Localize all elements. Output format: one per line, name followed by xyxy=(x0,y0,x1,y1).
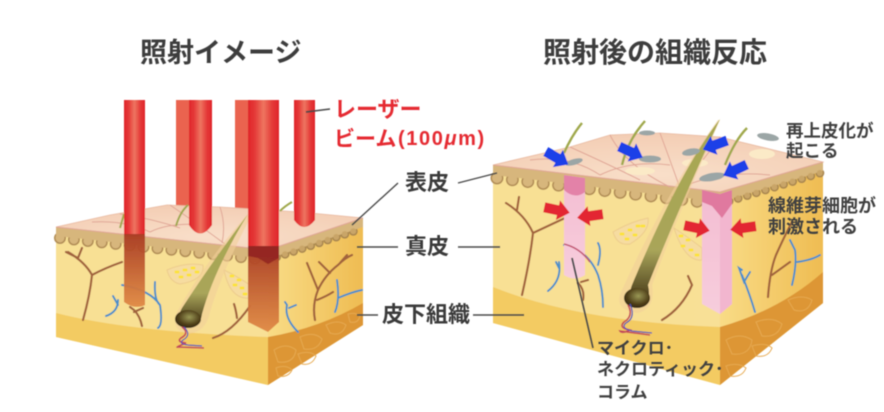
fat clusters xyxy=(167,264,250,298)
dermis front xyxy=(493,165,720,385)
label: laser beam: ビーム xyxy=(334,128,396,151)
blue vessels xyxy=(106,280,362,332)
label: micro necrotic column: マイクロ･ xyxy=(597,339,673,358)
micro necrotic column left xyxy=(564,175,585,278)
hair root vessels xyxy=(620,305,650,335)
micro necrotic column right xyxy=(702,190,732,314)
red arrows xyxy=(542,198,757,240)
label: fibroblast stimulation: 線維芽細胞が xyxy=(768,195,876,216)
subcutis side xyxy=(268,303,363,385)
label: micro necrotic column: コラム xyxy=(597,383,648,402)
hair follicle xyxy=(175,215,250,334)
panel: left skin block xyxy=(56,100,363,385)
fat clusters xyxy=(613,218,702,260)
label: epidermis: 表皮 xyxy=(405,170,449,195)
pale highlights xyxy=(625,167,655,175)
epidermis band xyxy=(493,162,823,204)
hair root vessels xyxy=(177,327,204,348)
small hairs xyxy=(120,202,292,228)
label: subcutaneous tissue: 皮下組織 xyxy=(382,302,470,327)
label: dermis: 真皮 xyxy=(405,234,449,259)
label: micro necrotic column: ネクロティック･ xyxy=(597,360,723,379)
brown vessels xyxy=(506,197,792,320)
back laser beams xyxy=(176,100,250,233)
label: fibroblast stimulation: 刺激される xyxy=(768,217,858,237)
hair follicle xyxy=(619,120,720,313)
leader lines xyxy=(306,109,593,348)
label: laser beam: μm) xyxy=(444,128,486,150)
dermis side face xyxy=(268,218,363,385)
dermis side xyxy=(720,162,823,385)
blue arrows xyxy=(541,131,751,185)
title: tissue response: 照射後の組織反応 xyxy=(543,37,767,68)
epidermis band xyxy=(56,218,363,260)
label: re-epithelialization: 再上皮化が xyxy=(786,121,874,141)
surface cell lines xyxy=(56,205,363,250)
panel: right skin block xyxy=(493,119,823,385)
label: laser beam: レーザー xyxy=(334,97,422,122)
blue vessels xyxy=(548,240,820,312)
surface cell lines xyxy=(493,133,823,192)
brown vessels xyxy=(66,248,352,338)
label: re-epithelialization: 起こる xyxy=(786,141,838,161)
front laser beams xyxy=(124,100,315,332)
skin surface xyxy=(493,133,823,192)
subcutis front xyxy=(56,313,268,385)
label: laser beam: (100 xyxy=(398,128,444,150)
dermis front face xyxy=(56,227,268,385)
grey flakes xyxy=(565,130,779,183)
skin surface xyxy=(56,205,363,250)
subcutis front xyxy=(493,287,720,385)
title: irradiation image: 照射イメージ xyxy=(140,38,301,68)
subcutis side xyxy=(720,272,823,385)
small hairs xyxy=(564,121,747,165)
